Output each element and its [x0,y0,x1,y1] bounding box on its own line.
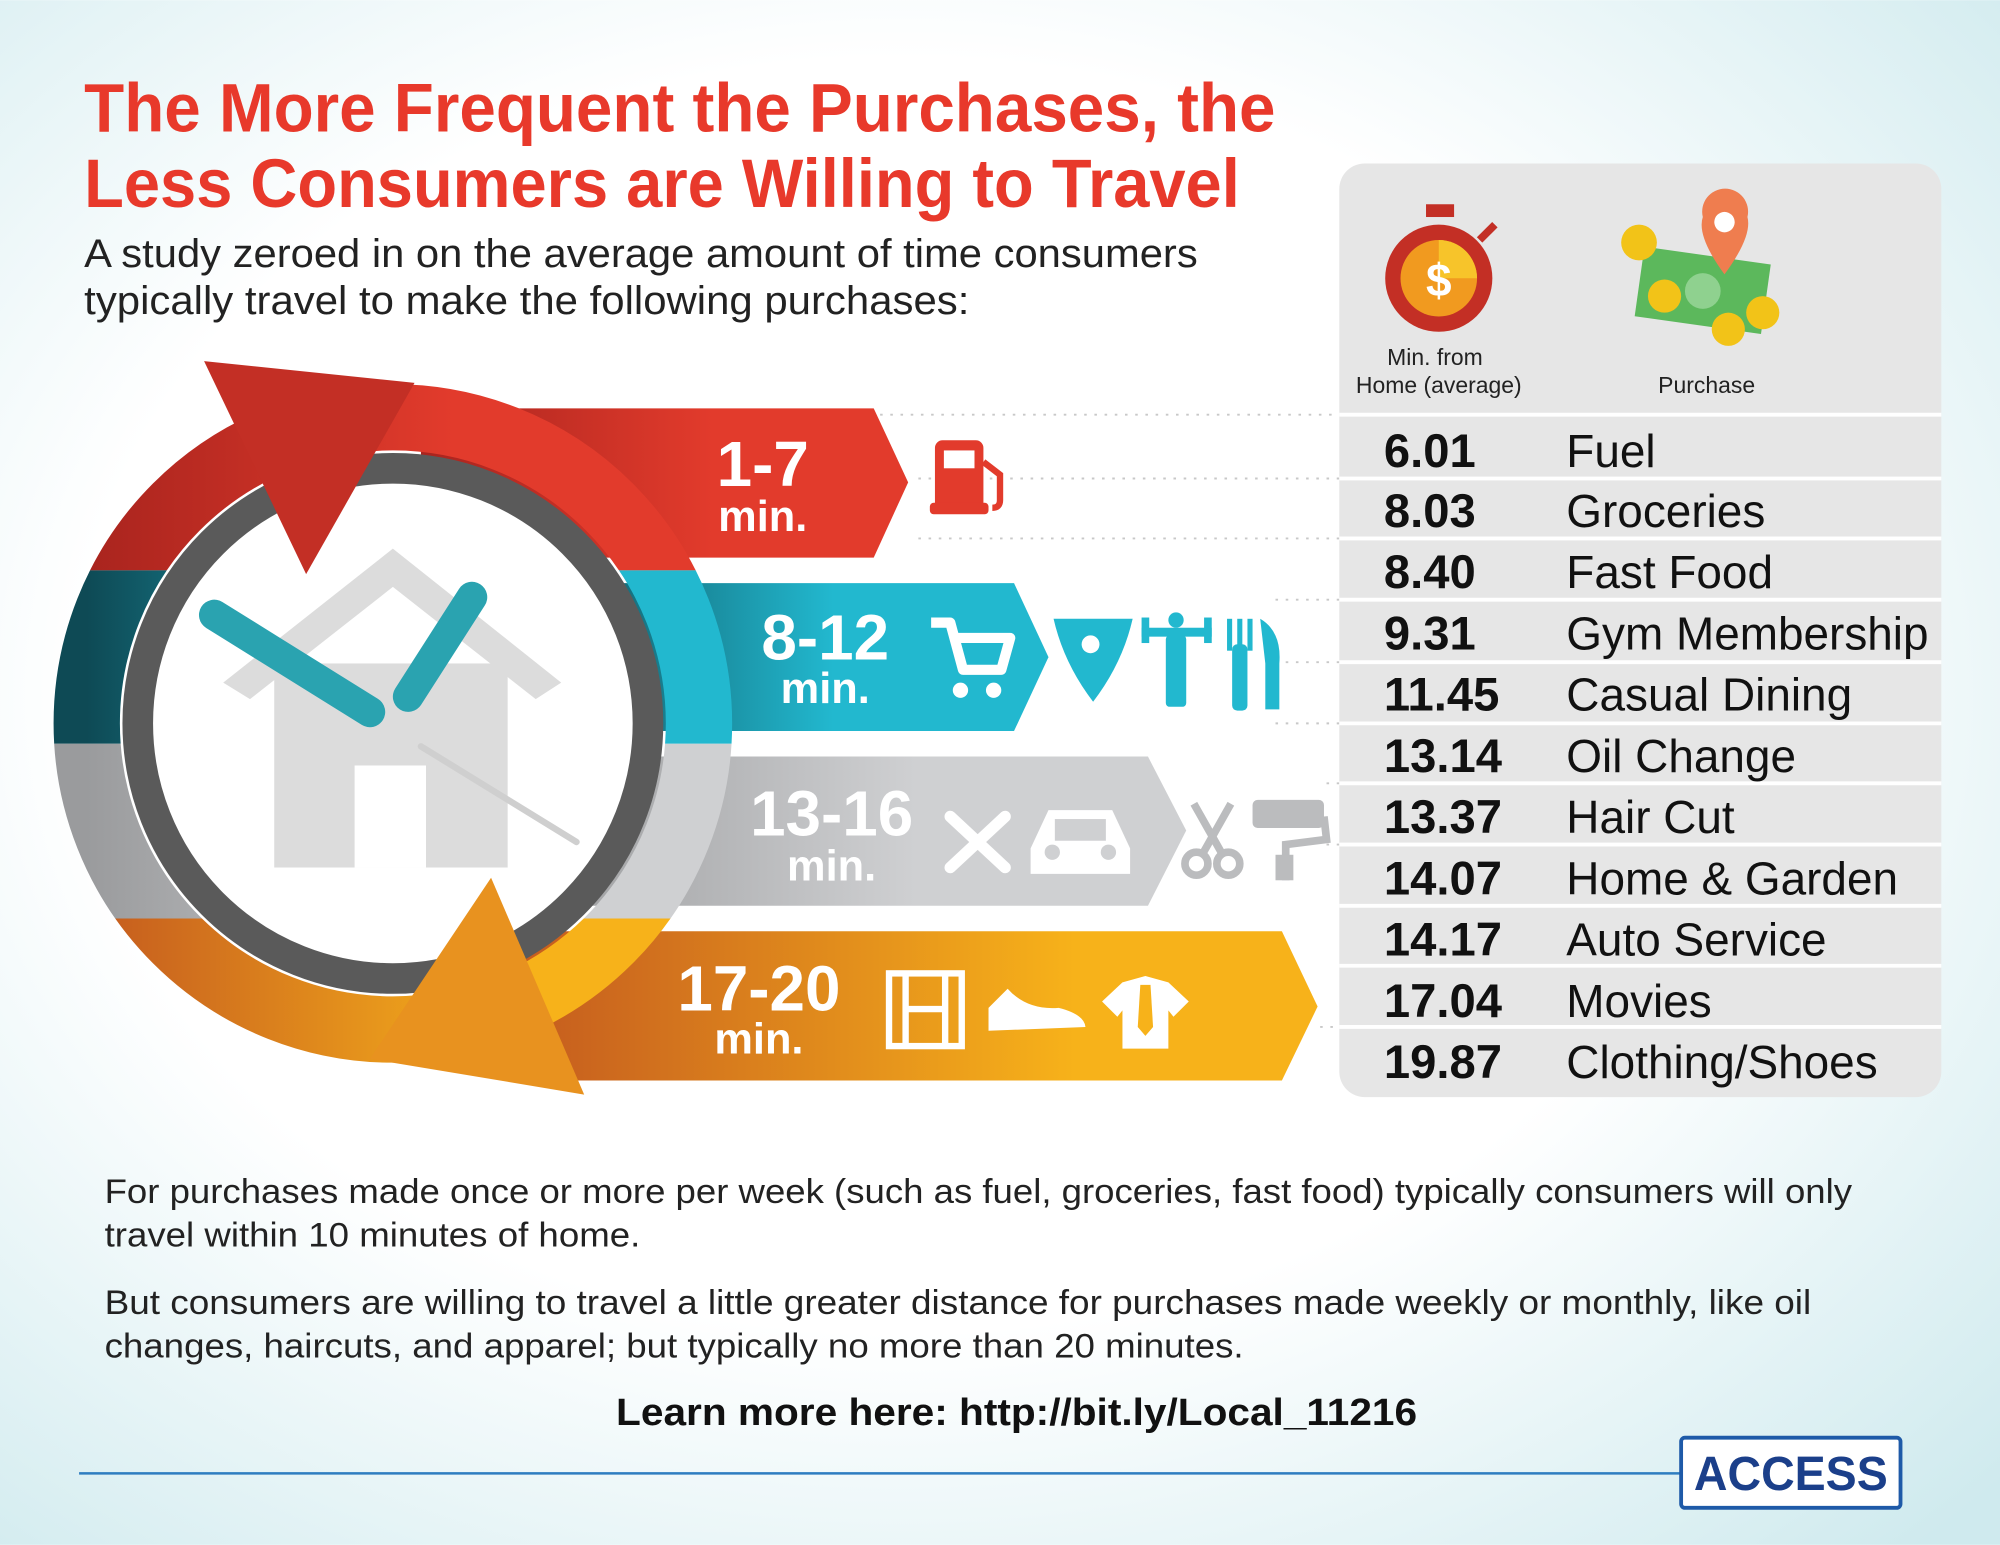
table labels: Casual Dining [1566,669,1852,721]
icon: fork and knife [1227,619,1280,711]
table labels: Home & Garden [1566,852,1898,904]
table labels: Clothing/Shoes [1566,1036,1878,1088]
table values: 8.40 [1384,546,1476,599]
banner: 13-16 min [510,757,1186,906]
icon: pizza pin [1054,619,1133,702]
column headers: Min. from [1387,344,1483,370]
table labels: Oil Change [1566,730,1796,782]
table labels: Gym Membership [1566,607,1929,659]
bottom text: But consumers are willing to travel a little greater distance for purchases made weekly or monthly, like oil [105,1284,1811,1322]
subtitle: typically travel to make the following purchases: [84,279,969,323]
table values: 6.01 [1384,425,1476,478]
footer line [79,1472,1681,1474]
logo: ACCESS: ACCESS [1694,1447,1888,1501]
icon: paint roller [1253,800,1327,880]
table values: 17.04 [1384,975,1502,1028]
icon: stopwatch [1385,204,1495,332]
icon: scissors [1185,804,1240,875]
column headers: Purchase [1658,372,1755,398]
table values: 9.31 [1384,607,1476,660]
banner: 17-20 min: 17-20 [677,952,840,1024]
column headers [1356,344,1755,398]
banner: 1-7 min: min. [718,493,807,541]
column headers: Home (average) [1356,372,1522,398]
table values: 19.87 [1384,1036,1502,1089]
table values: 14.07 [1384,852,1502,905]
title: The More Frequent the Purchases, the [84,70,1276,147]
panel: table [1339,163,1941,1097]
table values: 13.14 [1384,730,1502,783]
circle graphic [87,361,699,1095]
table labels: Hair Cut [1566,791,1735,843]
icon: film strip [889,973,962,1046]
bottom text [105,1173,1853,1365]
icon: tools [950,817,1005,868]
icon: sneaker [989,989,1085,1031]
table labels: Groceries [1566,485,1765,537]
bottom text: For purchases made once or more per week (such as fuel, groceries, fast food) typically consumers will only [105,1173,1853,1211]
banner: 17-20 min: min. [714,1016,803,1064]
banner: 8-12 min: min. [781,665,870,713]
table values: 8.03 [1384,485,1476,538]
banner: 13-16 min: min. [787,842,876,890]
icon: house [223,549,561,868]
icon: gym figure [1142,612,1212,707]
row separators [1339,415,1941,1027]
subtitle: A study zeroed in on the average amount of time consumers [84,232,1198,276]
table values: 11.45 [1384,669,1499,722]
arrowhead red [204,361,415,574]
icon: stopwatch: $ [1426,254,1452,306]
table labels: Fuel [1566,425,1656,477]
table labels [1566,425,1929,1088]
arrowhead orange [370,878,584,1095]
icon: money and pin [1621,189,1779,346]
banner: 1-7 min: 1-7 [717,428,809,500]
title: Less Consumers are Willing to Travel [84,145,1240,222]
banner: 13-16 min: 13-16 [750,778,913,850]
icon: car [1031,810,1130,874]
table labels: Fast Food [1566,546,1773,598]
bottom text: changes, haircuts, and apparel; but typically no more than 20 minutes. [105,1327,1244,1365]
dotted guide lines [880,415,1339,1027]
banner: 8-12 min: 8-12 [761,602,889,674]
table values [1384,425,1502,1089]
table labels: Auto Service [1566,914,1827,966]
title [84,70,1276,222]
bottom text: travel within 10 minutes of home. [105,1216,640,1254]
table labels: Movies [1566,975,1712,1027]
table values: 13.37 [1384,791,1502,844]
clock hands [214,597,472,712]
icon: fuel pump [930,440,1000,514]
table values: 14.17 [1384,914,1502,967]
learn more link text: Learn more here: http://bit.ly/Local_11216 [616,1391,1417,1434]
icon: shopping cart [931,623,1010,698]
subtitle [84,232,1198,323]
icon: shirt [1102,976,1189,1049]
banner: 17-20 min [510,931,1318,1081]
banner: 8-12 min [510,583,1048,731]
banner: 1-7 min [421,408,908,558]
